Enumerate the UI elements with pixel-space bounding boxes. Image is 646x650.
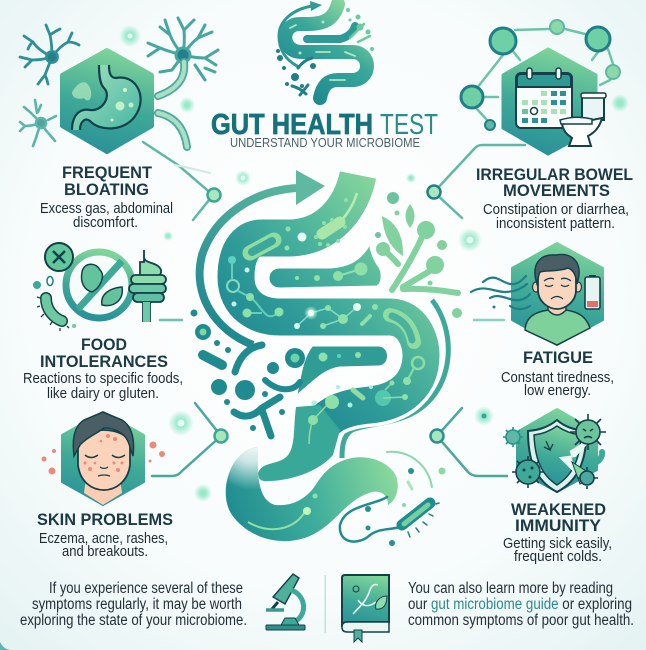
footer right text [408,580,634,629]
description: discomfort. [73,215,138,231]
description: Constant tiredness, [501,370,614,386]
heading line 2: INTOLERANCES [40,352,168,371]
footer left text: symptoms regularly, it may be worth [32,596,242,613]
title logo [276,1,374,98]
footer right text: You can also learn more by reading [408,580,613,597]
outer intestine line [342,300,448,458]
heading: FOOD [81,335,127,354]
heading line 2: MOVEMENTS [503,181,610,200]
description: Constipation or diarrhea, [483,202,629,218]
arrow [200,170,325,345]
tail and bacterium [340,452,439,542]
heading line 2: BLOATING [64,180,149,199]
description: and breakouts. [62,544,148,560]
leaves [375,192,462,318]
icon: book with DNA [342,575,389,642]
panel: irregular bowel movements [461,20,633,232]
heading: SKIN PROBLEMS [37,510,173,529]
footer left text: exploring the state of your microbiome. [20,612,247,629]
description: Excess gas, abdominal [40,201,173,217]
panel: fatigue [471,243,614,399]
neuron icons [20,18,218,147]
description: Getting sick easily, [503,536,612,552]
description: frequent colds. [514,549,602,565]
description: Eczema, acne, rashes, [39,531,168,547]
description: Reactions to specific foods, [23,371,183,387]
description [501,370,614,399]
logo intestine [285,4,367,98]
heading: WEAKENED [511,500,606,519]
central gut illustration [190,170,462,546]
heading: FATIGUE [523,348,593,367]
description [23,371,183,402]
heading: FREQUENT [62,163,153,182]
icon: microscope [266,574,305,630]
tail swoosh [226,447,398,541]
heading: IRREGULAR BOWEL [476,165,633,184]
microbes inside intestine [227,193,424,515]
loose dots [365,468,446,546]
title: GUT HEALTH [211,109,373,141]
intestine body [236,172,421,481]
decorative blobs left [190,310,305,436]
description [39,531,168,560]
icon: hexagon calendar and toilet [503,49,606,154]
icon: hexagon stomach [62,50,152,152]
connector lines and nodes [143,142,525,476]
description: inconsistent pattern. [496,216,615,232]
footer left text: If you experience several of these [49,580,243,597]
title: TEST [380,109,438,141]
description [503,536,612,565]
footer left text [20,580,247,629]
description [40,201,173,231]
icon: cracked shield with viruses [503,409,606,492]
icon: hexagon tired person [471,243,603,345]
footer right text: our gut microbiome guide or exploring [408,596,632,613]
subtitle: UNDERSTAND YOUR MICROBIOME [230,136,420,150]
heading line 2: IMMUNITY [515,516,602,535]
divider [324,575,326,633]
swoosh fade [226,447,262,515]
glowing particles [119,25,629,502]
description: like dairy or gluten. [47,386,159,402]
icon: face with acne [42,412,165,505]
panel: food intolerances [23,243,183,402]
panel: skin problems [37,412,173,560]
description [483,202,629,232]
icon: molecule network [461,20,620,130]
description: low energy. [524,383,591,399]
panel: weakened immunity [503,409,612,565]
icon: no food with gut [33,243,166,331]
panel: frequent bloating [20,18,218,231]
